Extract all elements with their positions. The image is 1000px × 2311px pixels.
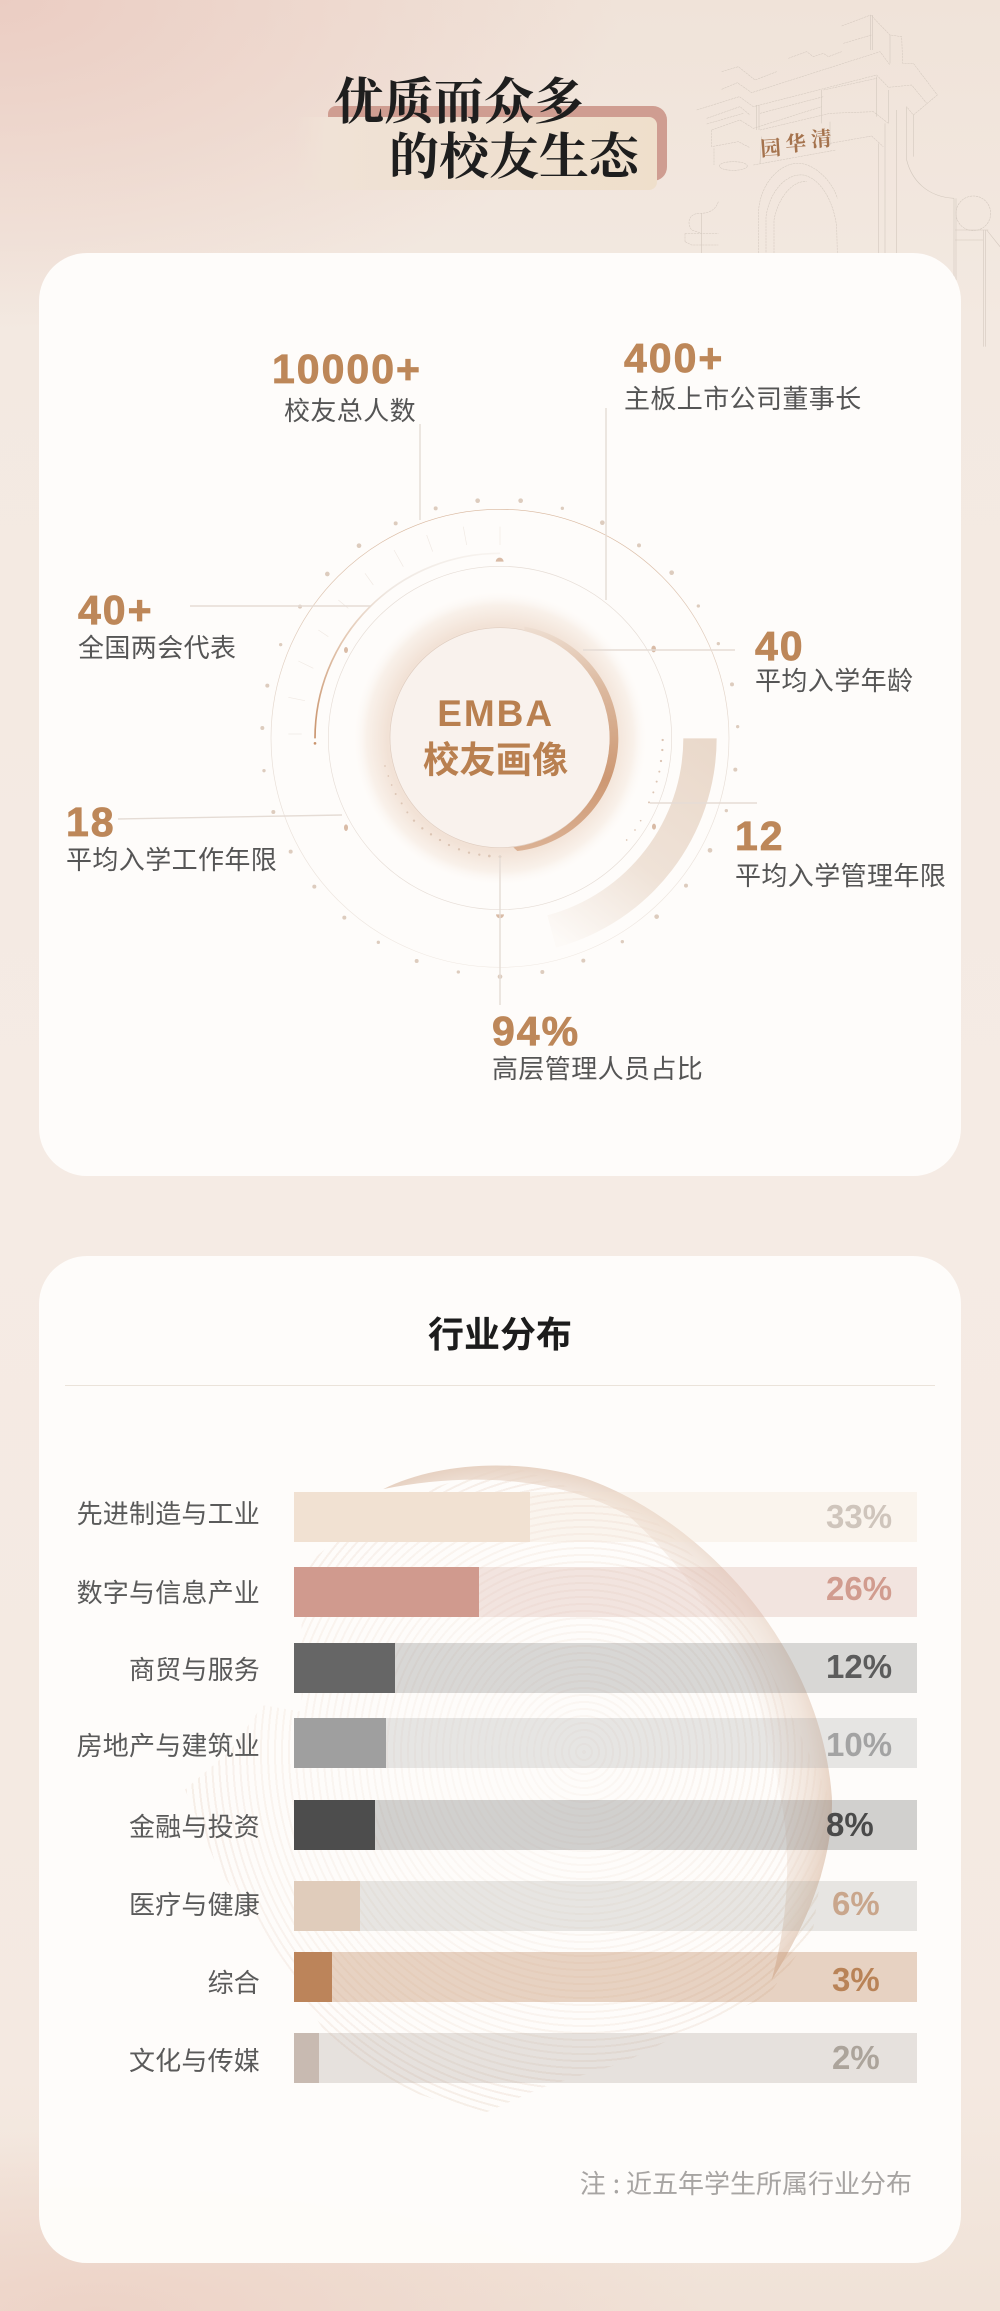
stat: NPC and CPPCC delegates: 全国两会代表 (78, 628, 236, 665)
stat: average admission age: 40 (755, 623, 805, 669)
stat: senior management share (492, 1008, 703, 1086)
bar row: culture and media: 文化与传媒 (129, 2041, 260, 2078)
stat: average management years: 平均入学管理年限 (735, 856, 946, 893)
title (328, 62, 667, 190)
stat: listed company chairmen: 400+ (624, 335, 724, 381)
footnote: 注 :近五年学生所属行业分布 (580, 2164, 912, 2201)
bar row: real estate and construction: 10% (826, 1726, 892, 1763)
faint ticks (288, 527, 500, 734)
illustration: Tsinghua gate line drawing: 清 (810, 121, 833, 153)
center glow (352, 590, 648, 887)
center label: 校友画像 (423, 732, 568, 784)
bar row: trade and services: 商贸与服务 (129, 1650, 260, 1687)
center label (423, 693, 568, 784)
wide pale arc (547, 738, 717, 948)
bar row: culture and media (129, 2033, 917, 2083)
bar row: real estate and construction: 房地产与建筑业 (77, 1726, 260, 1763)
stat: total alumni (272, 346, 422, 428)
middle ring (328, 566, 672, 910)
stat: average work years: 平均入学工作年限 (66, 840, 277, 877)
bar row: finance and investment (129, 1800, 917, 1850)
bar row: advanced manufacturing (77, 1492, 917, 1542)
bar row: digital and information: 数字与信息产业 (77, 1573, 260, 1610)
bar row: advanced manufacturing: 33% (826, 1498, 892, 1535)
ring markers (314, 558, 656, 918)
center label: EMBA (437, 693, 554, 734)
bar row: advanced manufacturing: 先进制造与工业 (77, 1494, 260, 1531)
stat: average management years: 12 (735, 813, 785, 859)
panel: alumni portrait (39, 253, 961, 1176)
stat: average work years (66, 799, 277, 877)
stat: total alumni: 校友总人数 (284, 391, 416, 428)
bar row: real estate and construction (77, 1718, 917, 1768)
outer ring (271, 509, 729, 967)
bar row: finance and investment: 金融与投资 (129, 1807, 260, 1844)
bar row: healthcare (129, 1881, 917, 1931)
bar row: digital and information: 26% (826, 1570, 892, 1607)
bar row: healthcare: 6% (832, 1885, 880, 1922)
background: fingerprint globe (185, 1465, 832, 2114)
stat: NPC and CPPCC delegates (78, 587, 236, 665)
stat: total alumni: 10000+ (272, 346, 422, 392)
stat: listed company chairmen (624, 335, 862, 416)
stat: average management years (735, 813, 946, 893)
tan left arc (315, 553, 500, 738)
illustration: Tsinghua gate line drawing: 华 (784, 126, 807, 157)
outer dots (260, 498, 739, 979)
stat: senior management share: 94% (492, 1008, 580, 1054)
illustration: Tsinghua gate line drawing: 园 (759, 131, 782, 162)
bar row: trade and services (129, 1643, 917, 1693)
stat: NPC and CPPCC delegates: 40+ (78, 587, 154, 633)
bar row: finance and investment: 8% (826, 1806, 874, 1843)
dotted arcs (384, 739, 664, 858)
stat: average admission age: 平均入学年龄 (755, 661, 913, 698)
bar row: trade and services: 12% (826, 1648, 892, 1685)
bar row: comprehensive: 综合 (208, 1963, 260, 2000)
bar row: healthcare: 医疗与健康 (129, 1885, 260, 1922)
stat: senior management share: 高层管理人员占比 (492, 1049, 703, 1086)
illustration: Tsinghua gate line drawing (684, 14, 1000, 346)
stat: average work years: 18 (66, 799, 116, 845)
bar row: digital and information (77, 1567, 917, 1617)
stat: average admission age (755, 623, 913, 698)
leader lines (118, 408, 757, 1005)
title: 的校友生态 (389, 117, 639, 189)
heading: 行业分布 (428, 1306, 572, 1358)
title: 优质而众多 (334, 62, 584, 134)
panel: industry distribution (39, 1256, 961, 2263)
inner circle (390, 628, 610, 848)
background: globe rim crescent (384, 1466, 832, 1979)
bar row: culture and media: 2% (832, 2039, 880, 2076)
radial diagram (118, 408, 757, 1005)
bar row: comprehensive (208, 1952, 917, 2002)
stat: listed company chairmen: 主板上市公司董事长 (624, 379, 862, 416)
bar row: comprehensive: 3% (832, 1961, 880, 1998)
crescent (513, 627, 618, 851)
